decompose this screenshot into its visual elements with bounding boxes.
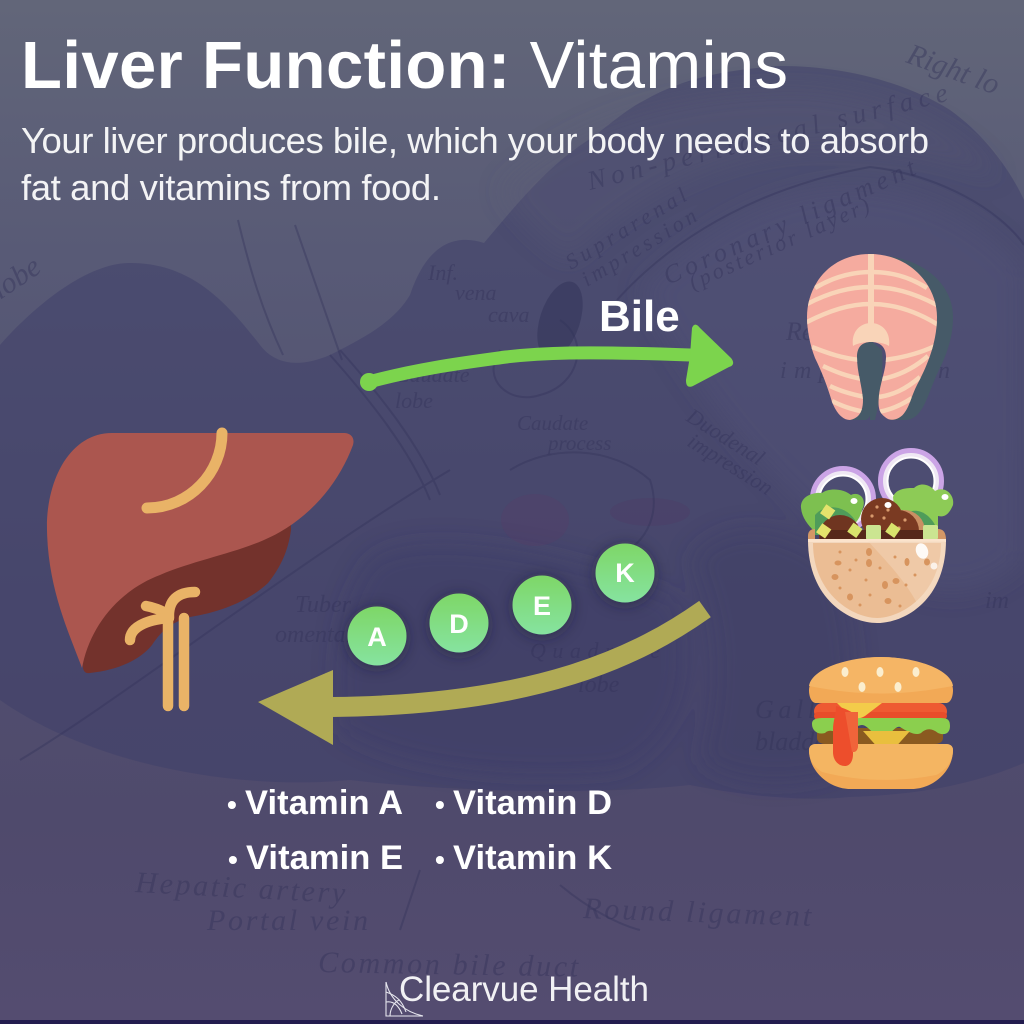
subtitle text: fat and vitamins from food.	[21, 167, 441, 208]
background: anatomical liver engraving: Caudate	[517, 411, 588, 435]
background: anatomical liver engraving: lobe	[578, 672, 620, 698]
icon: salad bowl	[801, 451, 953, 623]
ball: A	[348, 606, 406, 666]
background: anatomical liver engraving: Portal vein	[206, 904, 368, 937]
icon: salmon steak	[803, 254, 953, 420]
background: anatomical liver engraving: Inf.	[427, 260, 458, 285]
background: anatomical liver engraving: Right lo	[902, 37, 1004, 101]
ball: E	[512, 576, 572, 634]
background: anatomical liver engraving: Tuber	[295, 592, 352, 618]
arrow: bile to food	[360, 325, 733, 391]
ball: K	[596, 544, 654, 602]
background: anatomical liver engraving: cava	[488, 302, 530, 327]
ball: K: K	[615, 558, 635, 588]
background: anatomical liver engraving: impression	[780, 358, 950, 384]
ball: A: A	[367, 622, 387, 652]
vitamin list: •	[228, 844, 238, 875]
background: anatomical liver engraving: Gall	[755, 695, 815, 724]
logo: Clearvue Health: Clearvue Health	[399, 970, 649, 1009]
background: anatomical liver engraving: impression	[577, 203, 701, 291]
background: anatomical liver engraving: Caudate	[395, 362, 470, 387]
background: anatomical liver engraving: vena	[455, 280, 497, 305]
bile label: Bile	[599, 292, 680, 341]
vitamin balls	[348, 544, 654, 666]
background: anatomical liver engraving: lobe	[395, 388, 433, 413]
background: anatomical liver engraving: bladder	[755, 727, 837, 756]
vitamin list: Vitamin A	[245, 784, 403, 822]
vitamin list: •	[227, 789, 237, 820]
ball: D: D	[449, 609, 469, 639]
background: anatomical liver engraving: Coronary ligament	[659, 153, 921, 290]
vitamin list	[227, 784, 612, 877]
background: anatomical liver engraving: Round ligament	[582, 892, 812, 933]
icon: liver	[47, 433, 354, 706]
background: anatomical liver engraving: (posterior layer)	[685, 192, 873, 295]
title: Liver Function: Vitamins	[21, 28, 788, 103]
background: anatomical liver engraving: Suprarenal	[561, 182, 691, 274]
vitamin list: •	[435, 844, 445, 875]
background: anatomical liver engraving: Hepatic artery	[134, 866, 347, 910]
background: anatomical liver engraving: omentale	[275, 622, 363, 648]
background: anatomical liver engraving: Non-peritoneal surface	[583, 77, 950, 196]
background: anatomical liver engraving: Quadrate	[530, 638, 660, 663]
vitamin list: Vitamin D	[453, 784, 612, 822]
background: anatomical liver engraving: Duodenal	[682, 403, 769, 470]
vitamin list: Vitamin E	[246, 839, 403, 877]
background: anatomical liver engraving: Common bile duct	[318, 946, 579, 984]
vitamin list: Vitamin K	[453, 839, 612, 877]
ball: D	[430, 594, 488, 652]
ball: E: E	[533, 591, 551, 621]
background: anatomical liver engraving: im	[985, 588, 1009, 614]
vitamin list: •	[435, 789, 445, 820]
subtitle text	[21, 120, 929, 208]
background: anatomical liver engraving: impression	[683, 428, 778, 500]
arrow: vitamins to liver	[258, 609, 705, 745]
icon: hamburger	[809, 657, 953, 789]
subtitle text: Your liver produces bile, which your body needs to absorb	[21, 120, 929, 161]
background: anatomical liver engraving: process	[546, 431, 611, 455]
background: anatomical liver engraving: Re	[785, 317, 813, 346]
